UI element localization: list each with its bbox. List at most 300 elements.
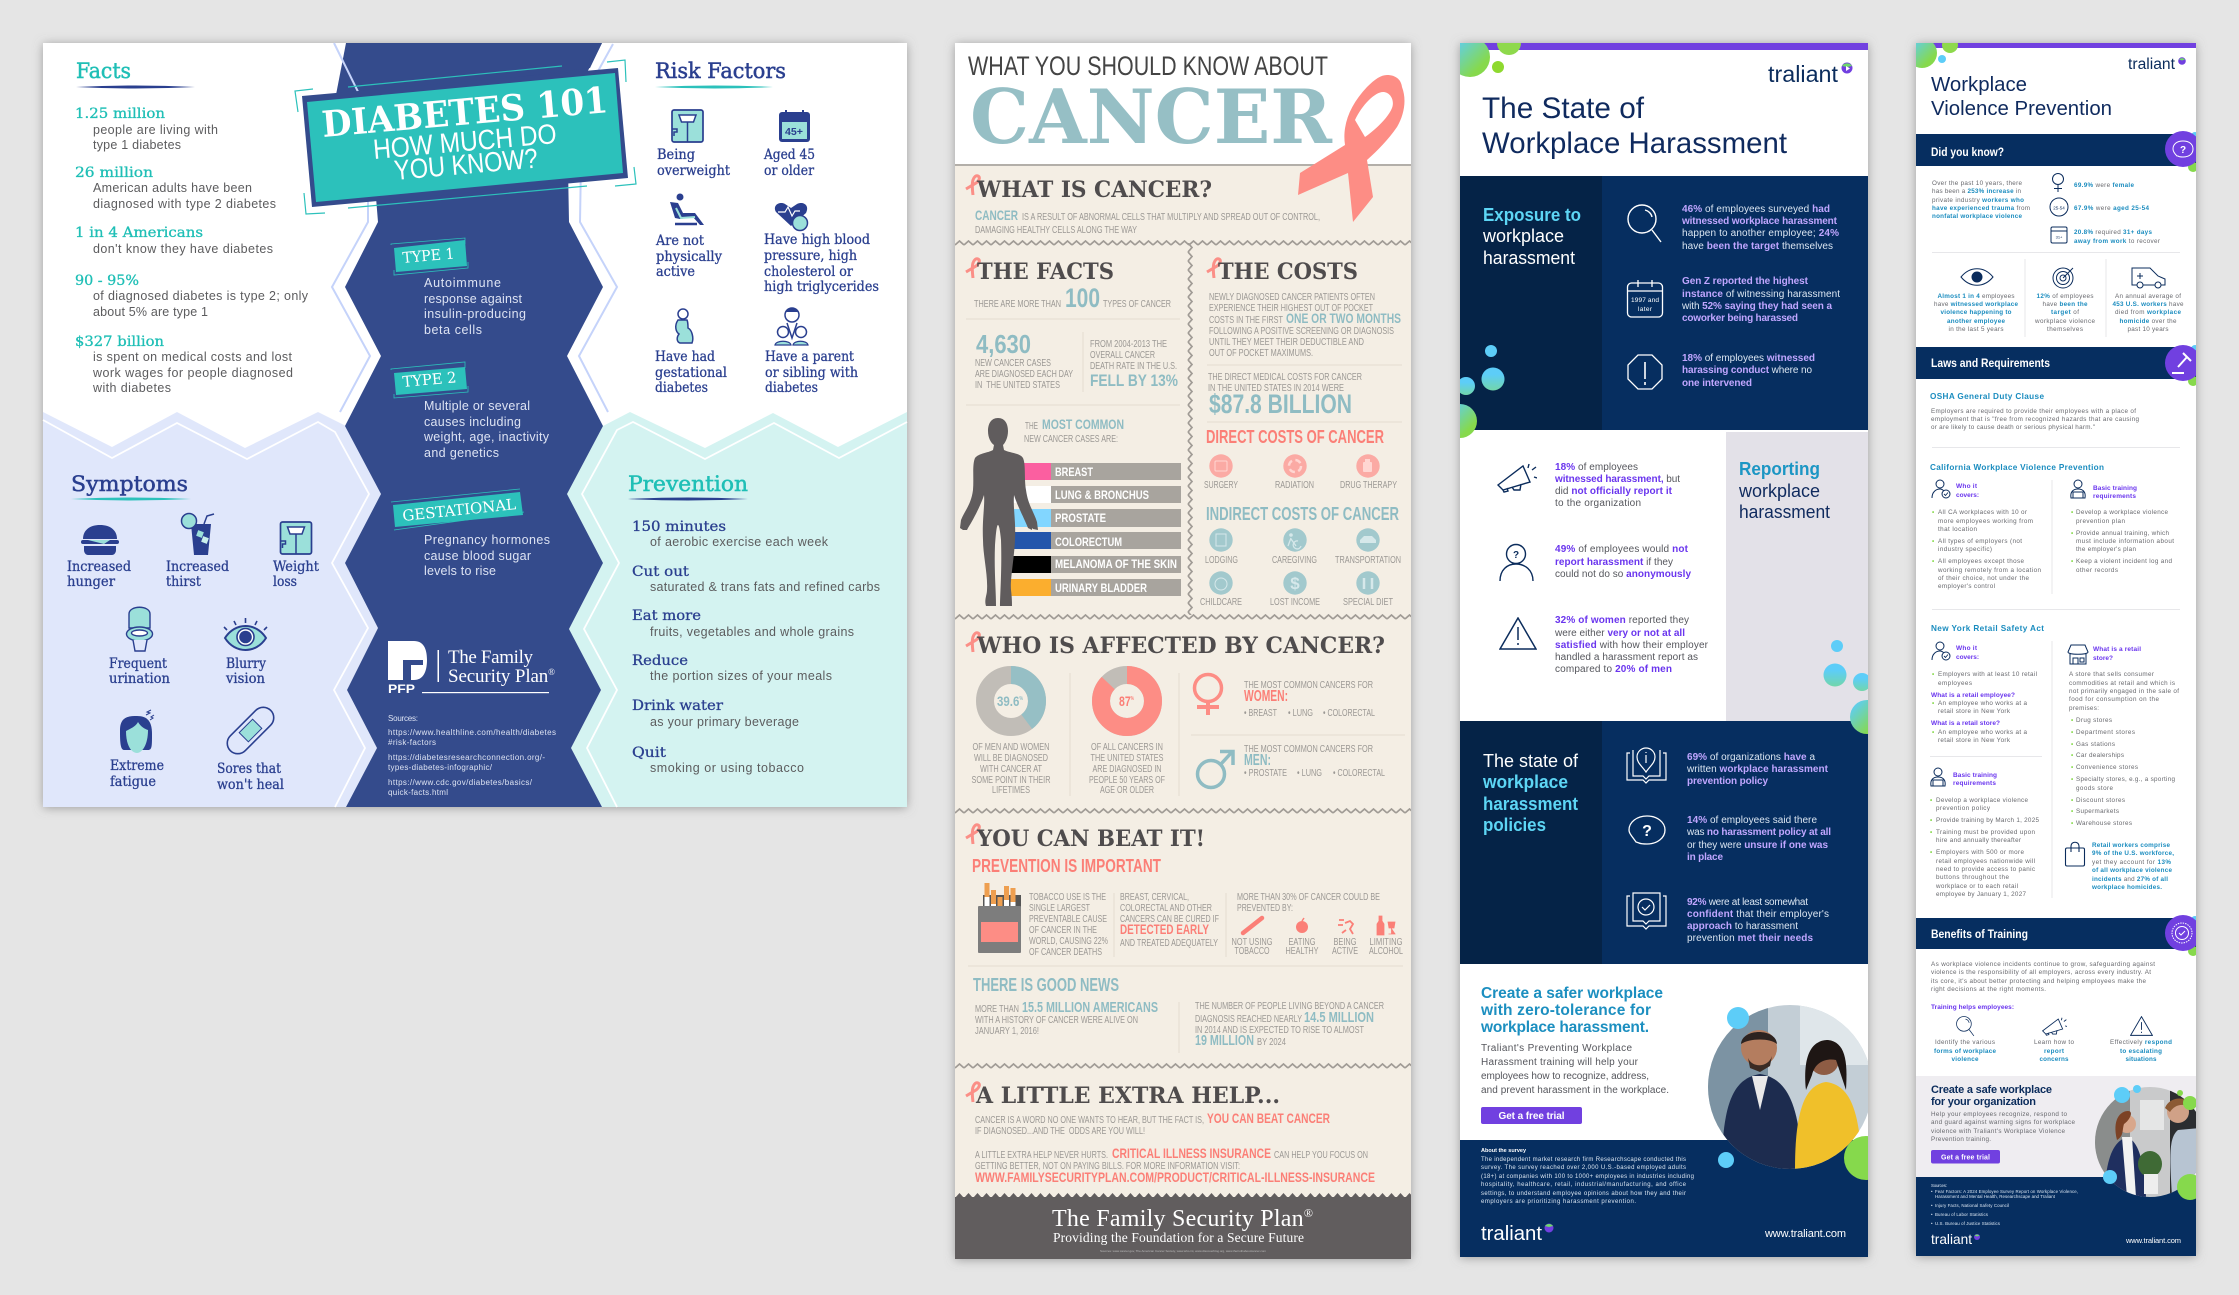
type 1 tag bbox=[391, 238, 468, 275]
text 69%: written workplace harassment bbox=[1686, 764, 1829, 775]
icon: calendar bbox=[779, 110, 810, 142]
bullet list: • bbox=[1932, 538, 1934, 545]
icon: magnifier bbox=[1628, 205, 1661, 242]
prevented by: NOT USING bbox=[1232, 937, 1273, 948]
caption 87% bbox=[1089, 742, 1165, 796]
section heading: workplace bbox=[1738, 481, 1820, 501]
section: reporting bbox=[1498, 432, 1871, 721]
icon: calendar: 31+ bbox=[2056, 234, 2063, 240]
facts list: 26 million bbox=[75, 165, 153, 181]
text block: IS A RESULT OF ABNORMAL CELLS THAT MULTIPLY AND SPREAD OUT OF CONTROL, bbox=[1022, 212, 1320, 223]
decorative bubbles left bbox=[1460, 345, 1504, 438]
text 92% bbox=[1687, 897, 1829, 944]
symptom labels: Weight bbox=[273, 559, 319, 575]
icon: person with question bbox=[1500, 544, 1533, 581]
detected early text: CANCERS CAN BE CURED IF bbox=[1120, 914, 1219, 925]
icon: burger bbox=[81, 525, 119, 555]
icon: mini ribbon bbox=[966, 259, 979, 278]
stat text 46%: have been the target themselves bbox=[1682, 241, 1833, 252]
footer band: ® bbox=[1304, 1206, 1313, 1220]
section: a little extra help bbox=[966, 1083, 1375, 1185]
bullet list: All types of employers (not bbox=[1938, 538, 2022, 545]
bullet list: Keep a violent incident log and bbox=[2076, 558, 2172, 565]
training list: • bbox=[1930, 817, 1932, 824]
icon: mini ribbon bbox=[966, 825, 979, 844]
retail store definition: • bbox=[2071, 717, 2073, 724]
prevented by: ALCOHOL bbox=[1369, 946, 1403, 957]
type 1 text: beta cells bbox=[424, 323, 482, 337]
icon: large ribbon bbox=[1298, 75, 1404, 222]
body: violence with Traliant's Workplace Violence bbox=[1931, 1128, 2065, 1135]
icon: question bubble bbox=[1629, 816, 1665, 844]
new york section: requirements bbox=[1953, 780, 1996, 787]
costs paragraph: UNTIL THEY MEET THEIR DEDUCTIBLE AND bbox=[1209, 337, 1364, 348]
good news bbox=[973, 975, 1384, 1049]
costs paragraph: COSTS IN THE FIRST bbox=[1209, 315, 1283, 326]
retail store definition bbox=[2069, 671, 2179, 827]
bullet list: industry specific) bbox=[1938, 546, 1992, 553]
logo: the family security plan: Security Plan bbox=[448, 666, 548, 687]
prevented by: ACTIVE bbox=[1332, 946, 1358, 957]
text block: YOU CAN BEAT CANCER bbox=[1207, 1110, 1330, 1126]
sources: Fear Factors: A 2024 Employee Survey Report on Workplace Violence, bbox=[1935, 1189, 2078, 1194]
heading: YOU CAN BEAT IT! bbox=[976, 826, 1205, 852]
who it covers list: What is a retail employee? bbox=[1931, 692, 2015, 699]
icon: policy book bbox=[1627, 748, 1666, 783]
new york section: New York Retail Safety Act bbox=[1931, 624, 2044, 633]
bar list: common cancers: MELANOMA OF THE SKIN bbox=[1055, 557, 1177, 571]
stat columns: died from workplace bbox=[2115, 309, 2181, 316]
icon: calendar bbox=[1628, 280, 1662, 317]
training benefits: to escalating bbox=[2120, 1048, 2162, 1055]
text 92%: 92% were at least somewhat bbox=[1687, 897, 1808, 908]
section heading: policies bbox=[1483, 815, 1546, 835]
caption 87%: AGE OR OLDER bbox=[1100, 785, 1154, 796]
bullet list: that location bbox=[1938, 526, 1977, 533]
text 49%: 49% of employees would not bbox=[1555, 544, 1689, 555]
icon: gavel badge bbox=[2165, 345, 2201, 381]
section: create a safe workplace bbox=[1916, 1076, 2196, 1177]
good news: DIAGNOSIS REACHED NEARLY bbox=[1195, 1014, 1302, 1025]
panel: cancer bbox=[955, 43, 1411, 1259]
benefits paragraph: As workplace violence incidents continue to grow, safeguarding against bbox=[1931, 961, 2155, 968]
risk factor labels: Have had bbox=[655, 349, 715, 365]
icon: eye bbox=[1961, 269, 1993, 285]
stat columns: target of bbox=[2051, 309, 2079, 316]
facts list: type 1 diabetes bbox=[93, 138, 181, 152]
stat columns: in the last 5 years bbox=[1948, 326, 2004, 333]
symptom labels: fatigue bbox=[110, 774, 156, 790]
training list: • bbox=[1930, 829, 1932, 836]
demographic stats: 67.9% were aged 25-54 bbox=[2074, 205, 2149, 212]
cta body: employees how to recognize, address, bbox=[1481, 1071, 1649, 1082]
sources: • bbox=[1931, 1203, 1933, 1208]
caption 87%: ARE DIAGNOSED IN bbox=[1092, 764, 1162, 775]
types of cancer bbox=[974, 283, 1171, 313]
training list: need to provide access to panic bbox=[1936, 866, 2035, 873]
stat columns: 453 U.S. workers have bbox=[2112, 301, 2184, 308]
retail store definition: Gas stations bbox=[2076, 741, 2115, 748]
retail callout: of all workplace violence bbox=[2092, 867, 2172, 874]
osha clause bbox=[1930, 392, 2139, 431]
text 32%: handled a harassment report as bbox=[1555, 652, 1698, 663]
indirect costs: CHILDCARE bbox=[1200, 597, 1242, 608]
sources: Injury Facts, National Safety Council bbox=[1935, 1203, 2009, 1208]
decorative bubbles photo bbox=[2103, 1085, 2203, 1200]
about the survey: About the survey bbox=[1481, 1148, 1527, 1154]
bullet list: • bbox=[2071, 558, 2073, 565]
bar list: common cancers: BREAST bbox=[1055, 465, 1094, 479]
footer navy bbox=[1460, 1140, 1868, 1257]
logo: traliant: traliant bbox=[2128, 56, 2176, 73]
california section: covers: bbox=[1956, 492, 1979, 499]
stat: 87.8 billion: $87.8 BILLION bbox=[1209, 389, 1352, 419]
prevention list: saturated & trans fats and refined carbs bbox=[650, 580, 880, 594]
detected early text: AND TREATED ADEQUATELY bbox=[1120, 938, 1218, 949]
most common heading bbox=[1024, 416, 1124, 445]
who it covers list: retail store in New York bbox=[1938, 737, 2011, 744]
icon: megaphone bbox=[2043, 1018, 2067, 1035]
icon: caregiving bbox=[1283, 528, 1307, 552]
cta heading: with zero-tolerance for bbox=[1480, 1002, 1651, 1019]
stat text 18% bbox=[1682, 354, 1814, 386]
symptom labels: Increased bbox=[67, 559, 131, 575]
new york section: store? bbox=[2093, 655, 2113, 662]
training benefits: concerns bbox=[2040, 1056, 2069, 1063]
heading: WHO IS AFFECTED BY CANCER? bbox=[976, 633, 1385, 659]
most common heading: THE bbox=[1025, 421, 1038, 432]
text 18%: did not officially report it bbox=[1555, 486, 1673, 497]
icon: magnifier bbox=[1957, 1017, 1974, 1036]
detected early text bbox=[1120, 892, 1219, 949]
section: the costs bbox=[1200, 259, 1402, 608]
icon: shopping bag bbox=[2066, 842, 2084, 866]
type 1 text: insulin-producing bbox=[424, 307, 526, 321]
detected early text: COLORECTAL AND OTHER bbox=[1120, 903, 1212, 914]
tobacco text: WORLD, CAUSING 22% bbox=[1029, 936, 1108, 947]
training benefits bbox=[1934, 1017, 2172, 1063]
benefits paragraph: violence is the responsibility of all employers, across every industry. At bbox=[1931, 969, 2151, 976]
logo: traliant bbox=[1768, 62, 1852, 82]
california section: California Workplace Violence Prevention bbox=[1930, 463, 2104, 472]
section heading bbox=[1482, 751, 1579, 835]
icon: purple question badge: ? bbox=[2180, 145, 2186, 156]
women text: • COLORECTAL bbox=[1323, 708, 1375, 719]
symptom labels: urination bbox=[109, 671, 170, 687]
heading: A LITTLE EXTRA HELP... bbox=[975, 1083, 1280, 1109]
stat text gen z bbox=[1681, 276, 1840, 324]
footer band: Providing the Foundation for a Secure Future bbox=[1053, 1230, 1304, 1245]
icon: age circle: 25-54 bbox=[2053, 206, 2065, 210]
button: get a free trial: Get a free trial bbox=[1498, 1111, 1565, 1122]
good news: IN 2014 AND IS EXPECTED TO RISE TO ALMOST bbox=[1195, 1025, 1364, 1036]
section heading bbox=[1739, 462, 1830, 518]
gestational text: Pregnancy hormones bbox=[424, 533, 550, 547]
green bubble bbox=[1850, 700, 1868, 734]
icon: person check bbox=[1932, 642, 1950, 660]
icon: runner bbox=[1338, 920, 1353, 934]
logo: traliant: traliant bbox=[1768, 61, 1839, 87]
text 32%: were either very or not at all bbox=[1554, 628, 1685, 639]
bullet list: must include information about bbox=[2076, 538, 2174, 545]
logo: the family security plan: ® bbox=[548, 667, 555, 677]
symptom labels: Blurry bbox=[226, 656, 266, 672]
costs paragraph: ONE OR TWO MONTHS bbox=[1286, 310, 1401, 326]
text 32%: compared to 20% of men bbox=[1555, 664, 1672, 675]
prevention list: Quit bbox=[632, 745, 666, 761]
icon: apple bbox=[1296, 918, 1308, 933]
prevention list: smoking or using tobacco bbox=[650, 761, 804, 775]
bullet list: Provide annual training, which bbox=[2076, 530, 2169, 537]
prevented by: TOBACCO bbox=[1234, 946, 1270, 957]
stat columns: another employee bbox=[1947, 318, 2005, 325]
sources: Sources: bbox=[1931, 1183, 1947, 1188]
text block: CANCER bbox=[975, 207, 1018, 223]
stat: 87.8 billion: THE DIRECT MEDICAL COSTS FOR CANCER bbox=[1208, 372, 1362, 383]
men text bbox=[1244, 744, 1385, 779]
prevented by: EATING bbox=[1288, 937, 1316, 948]
icon: checked book bbox=[1627, 893, 1666, 929]
donut chart: 87% bbox=[1101, 675, 1153, 727]
symptom labels: vision bbox=[225, 671, 265, 687]
stat: fell by 13%: FELL BY 13% bbox=[1090, 371, 1178, 390]
retail store definition: • bbox=[2071, 820, 2073, 827]
bar list: common cancers bbox=[1005, 463, 1181, 596]
prevented by bbox=[1232, 892, 1403, 957]
logo: the family security plan bbox=[388, 641, 555, 696]
title: Violence Prevention bbox=[1931, 98, 2112, 120]
retail callout: yet they account for 13% bbox=[2092, 859, 2171, 866]
donut chart: 87%: % bbox=[1131, 696, 1134, 702]
footer band bbox=[955, 1192, 1411, 1259]
title bbox=[1931, 74, 2112, 120]
icon: purple question badge bbox=[2165, 131, 2201, 167]
type 1 text: response against bbox=[424, 292, 523, 306]
section band: laws and requirements bbox=[1916, 345, 2201, 386]
caption 39.6%: LIFETIMES bbox=[992, 785, 1030, 796]
text 92%: confident that their employer's bbox=[1687, 909, 1829, 920]
risk factor labels: Have a parent bbox=[765, 349, 854, 365]
body: and guard against warning signs for workplace bbox=[1931, 1119, 2075, 1126]
icon: toilet bbox=[126, 607, 152, 651]
section heading bbox=[1483, 208, 1580, 264]
facts list: $327 billion bbox=[75, 334, 164, 350]
type 2 text bbox=[423, 399, 550, 460]
risk factor labels: high triglycerides bbox=[764, 279, 879, 295]
caption 39.6%: WITH CANCER AT bbox=[980, 764, 1042, 775]
gestational text bbox=[424, 533, 550, 578]
heading: THE FACTS bbox=[977, 259, 1114, 285]
icon: weight scale bbox=[280, 522, 312, 554]
icon: person check bbox=[1932, 480, 1950, 498]
symptom labels: thirst bbox=[166, 574, 201, 590]
stat text 18%: one intervened bbox=[1682, 378, 1752, 389]
section: exposure bbox=[1443, 176, 1868, 438]
about the survey: (18+) at companies with 100 to 1000+ employees in industries including bbox=[1481, 1174, 1694, 1180]
women text: • LUNG bbox=[1288, 708, 1313, 719]
type 1 text: Autoimmune bbox=[424, 276, 501, 290]
good news: THERE IS GOOD NEWS bbox=[973, 975, 1119, 995]
panel: state of workplace harassment bbox=[1443, 31, 1888, 1257]
costs paragraph: OUT OF POCKET MAXIMUMS. bbox=[1209, 348, 1313, 359]
men text: • PROSTATE bbox=[1244, 768, 1287, 779]
detected early text: DETECTED EARLY bbox=[1120, 921, 1209, 937]
risk factor labels: Being bbox=[657, 147, 695, 163]
button: get a free trial: Get a free trial bbox=[1941, 1154, 1990, 1162]
text 14%: 14% of employees said there bbox=[1687, 815, 1817, 826]
risk factor labels: Have high blood bbox=[764, 232, 870, 248]
men text: • LUNG bbox=[1297, 768, 1322, 779]
benefits paragraph: Training helps employees: bbox=[1931, 1004, 2014, 1011]
icon: megaphone bbox=[1498, 464, 1537, 492]
website url: www.traliant.com bbox=[1764, 1228, 1846, 1240]
stat columns: themselves bbox=[2047, 326, 2083, 333]
title banner: DIABETES 101 bbox=[320, 79, 610, 146]
cta heading bbox=[1480, 985, 1663, 1036]
icon: scale bbox=[672, 110, 703, 142]
purple top bar bbox=[1916, 43, 2196, 48]
bar list: common cancers: PROSTATE bbox=[1055, 511, 1106, 525]
costs paragraph: NEWLY DIAGNOSED CANCER PATIENTS OFTEN bbox=[1209, 292, 1375, 303]
type 2 text: weight, age, inactivity bbox=[423, 430, 550, 444]
who it covers list: • bbox=[1932, 700, 1934, 707]
footer band: Sources: www.cancer.gov, The American Cancer Society, www.who.int, www.discoverblog.org, www.thetruthaboutcancer.com bbox=[1100, 1249, 1266, 1253]
bullet list: more employees working from bbox=[1938, 518, 2033, 525]
title: Workplace Harassment bbox=[1482, 127, 1788, 160]
logo: traliant footer: traliant bbox=[1481, 1223, 1542, 1245]
stat: fell by 13%: DEATH RATE IN THE U.S. bbox=[1090, 361, 1177, 372]
facts list: 1.25 million bbox=[75, 106, 165, 122]
stat text 46%: witnessed workplace harassment bbox=[1681, 216, 1838, 227]
risk factor labels: active bbox=[656, 264, 695, 280]
training list: • bbox=[1930, 797, 1932, 804]
heading: WHAT IS CANCER? bbox=[976, 177, 1212, 203]
did you know text: nonfatal workplace violence bbox=[1932, 213, 2022, 220]
stat text 46%: happen to another employee; 24% bbox=[1682, 228, 1839, 239]
donut chart: 39.6%: 39.6 bbox=[997, 693, 1024, 709]
symptom labels: Sores that bbox=[217, 761, 281, 777]
good news: 14.5 MILLION bbox=[1304, 1009, 1374, 1026]
who it covers list: employees bbox=[1938, 680, 1972, 687]
header title: WHAT YOU SHOULD KNOW ABOUT bbox=[968, 51, 1328, 81]
title bbox=[1482, 92, 1788, 160]
text 14%: or they were unsure if one was bbox=[1687, 840, 1828, 851]
icon: transportation bbox=[1356, 528, 1380, 552]
stat text 18%: 18% of employees witnessed bbox=[1682, 353, 1815, 364]
retail store definition: Drug stores bbox=[2076, 717, 2112, 724]
bullet list: • bbox=[2071, 509, 2073, 516]
about the survey: survey. The survey reached over 2,000 U.S.-based employed adults bbox=[1481, 1165, 1686, 1171]
icon: tired head bbox=[120, 710, 154, 753]
icon: mini ribbon bbox=[1207, 259, 1220, 278]
sources: Sources: bbox=[388, 714, 418, 723]
text block bbox=[975, 207, 1320, 236]
prevention list: Reduce bbox=[632, 653, 688, 669]
retail callout: Retail workers comprise bbox=[2092, 842, 2170, 849]
training benefits: report bbox=[2044, 1048, 2065, 1055]
symptom labels bbox=[67, 559, 319, 793]
direct costs: RADIATION bbox=[1275, 480, 1314, 491]
women text: WOMEN: bbox=[1244, 688, 1288, 705]
training list: • bbox=[1930, 849, 1932, 856]
stat text gen z: instance of witnessing harassment bbox=[1682, 289, 1840, 300]
text 49% bbox=[1555, 544, 1691, 580]
bullet list: prevention plan bbox=[2076, 518, 2125, 525]
icon: checkmark badge bbox=[2165, 915, 2201, 951]
heading: symptoms: Symptoms bbox=[71, 472, 188, 496]
retail store definition: • bbox=[2071, 729, 2073, 736]
type 2 text: Multiple or several bbox=[424, 399, 530, 413]
training benefits: Effectively respond bbox=[2110, 1039, 2172, 1046]
cta heading: Create a safer workplace bbox=[1481, 985, 1663, 1002]
most common heading: NEW CANCER CASES ARE: bbox=[1024, 434, 1118, 445]
heading: prevention: Prevention bbox=[628, 472, 748, 496]
bullet list: working remotely from a location bbox=[1937, 567, 2041, 574]
section: what is cancer bbox=[966, 176, 1320, 236]
decorative bubbles right bbox=[1824, 640, 1871, 691]
facts list: don't know they have diabetes bbox=[93, 242, 273, 256]
retail store definition: Convenience stores bbox=[2076, 764, 2138, 771]
sources: https://diabetesresearchconnection.org/- bbox=[388, 753, 545, 762]
icon: lost income bbox=[1283, 571, 1307, 595]
indirect costs bbox=[1200, 504, 1401, 608]
donut chart: 39.6% bbox=[985, 675, 1037, 727]
gestational text: levels to rise bbox=[424, 564, 496, 578]
section heading: Exposure to bbox=[1483, 205, 1581, 225]
icon: store bbox=[2068, 645, 2088, 664]
risk factor labels: or older bbox=[764, 163, 814, 179]
icon: bottle and glass bbox=[1377, 916, 1396, 935]
title banner: HOW MUCH DO bbox=[372, 118, 558, 165]
cta heading: workplace harassment. bbox=[1480, 1019, 1649, 1036]
stat: fell by 13%: OVERALL CANCER bbox=[1090, 350, 1155, 361]
section heading: harassment bbox=[1483, 794, 1578, 814]
section band: did you know bbox=[1916, 131, 2201, 172]
tobacco text bbox=[1029, 892, 1108, 958]
caption 87%: THE UNITED STATES bbox=[1090, 753, 1164, 764]
new york section bbox=[1930, 624, 2179, 898]
prevention list: Cut out bbox=[632, 564, 689, 580]
stat: fell by 13%: FROM 2004-2013 THE bbox=[1090, 339, 1167, 350]
title banner: YOU KNOW? bbox=[393, 143, 539, 186]
donut chart: 39.6%: % bbox=[1019, 696, 1023, 702]
icon: stop alert bbox=[1628, 355, 1662, 389]
icon: male bbox=[1198, 752, 1233, 788]
type 2 tag bbox=[391, 362, 468, 398]
stat text 46% bbox=[1681, 204, 1839, 252]
decorative bubbles photo bbox=[1718, 1007, 1868, 1180]
about the survey: settings, to understand employee opinions about how they and their bbox=[1481, 1191, 1686, 1197]
retail store definition: • bbox=[2071, 741, 2073, 748]
demographic stats bbox=[2050, 174, 2160, 245]
body: Help your employees recognize, respond to bbox=[1931, 1111, 2067, 1118]
facts list: diagnosed with type 2 diabetes bbox=[93, 197, 276, 211]
stat: fell by 13% bbox=[1090, 339, 1178, 390]
type 2 tag: TYPE 2 bbox=[402, 368, 457, 391]
risk factors grid bbox=[655, 110, 879, 396]
stat: 4,630: ARE DIAGNOSED EACH DAY bbox=[975, 369, 1073, 380]
icon: lodging bbox=[1209, 528, 1233, 552]
who it covers list bbox=[1931, 671, 2037, 744]
men text: • COLORECTAL bbox=[1333, 768, 1385, 779]
risk factor labels: pressure, high bbox=[764, 248, 857, 264]
title: Workplace bbox=[1931, 74, 2027, 96]
logo: the family security plan: The Family bbox=[448, 647, 534, 668]
who it covers list: An employee who works at a bbox=[1938, 729, 2027, 736]
tobacco text: OF CANCER DEATHS bbox=[1029, 947, 1102, 958]
retail store definition: Supermarkets bbox=[2076, 808, 2119, 815]
retail store definition: goods store bbox=[2076, 785, 2113, 792]
